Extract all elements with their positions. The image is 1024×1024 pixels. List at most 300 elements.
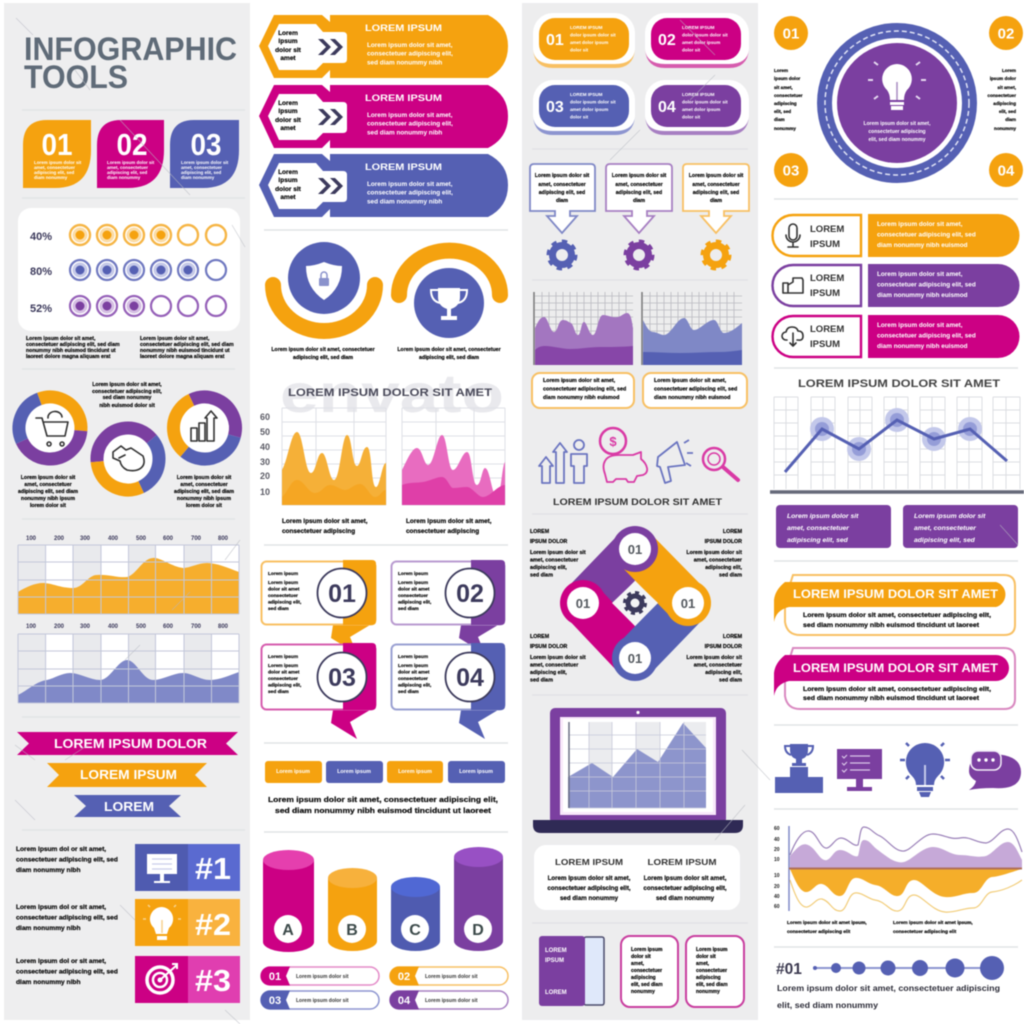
cylinder A [263,850,314,952]
callout: orange with gear: adipiscing elit, sed [693,190,739,196]
panel: laptop text: LOREM IPSUM [648,857,716,867]
text block: diamond captions: LOREM [530,634,549,640]
text block: medallion sides: Lorem [774,68,788,73]
panel: laptop text: Lorem ipsum dolor sit amet, [644,875,726,882]
text block: medallion sides: diam [1005,117,1016,122]
buttons row: Lorem ipsum [337,769,371,775]
note box right: elit, sed diam [696,982,728,988]
card: 02 [392,560,505,654]
text block: donut captions: Lorem ipsum dolor sit [21,475,75,481]
chart: orange area: 300 [80,536,91,542]
chart: blue area: 600 [163,624,174,630]
callout: purple with gear [606,164,672,268]
note box right: consectetuer [696,968,727,974]
card 02 [97,120,164,188]
y axis labels: 60 [260,412,270,422]
banner: blue: sed diam nonummy nibh [367,198,442,206]
purple note left: Lorem ipsum dolor sit [787,513,858,520]
callout: blue with gear: adipiscing elit, sed [539,190,585,196]
ribbon: magenta [17,732,238,755]
row: purple hand: LOREM [810,273,844,284]
buttons row [265,761,505,783]
caption box left [532,373,634,408]
text block: donut captions: lorem dolor sit [30,503,66,509]
chart: orange area: 700 [191,536,202,542]
text block: badge captions: adipiscing elit, sed diam [419,355,479,361]
text block: medallion sides [774,68,1016,131]
text block: peak captions: consectetuer adipiscing [282,528,355,535]
card: 02: Lorem ipsum [398,572,428,577]
text block: diamond captions: amet, consectetuer [694,558,742,564]
tag 01: dolor ipsum dolor sit [570,32,616,38]
ribbon: blue: LOREM [104,799,154,814]
row: orange mic: IPSUM [810,239,840,250]
card 01: Lorem ipsum dolor sit [34,160,81,165]
badge: shield [273,242,375,331]
text block: wave captions [787,920,973,935]
watermark: envato [280,364,504,424]
text block: donut captions: nonummy nibh ipsum [21,496,75,502]
text block: rows: diam nonummy nibh [16,925,80,932]
chart: orange area: 100 [26,536,37,542]
label card: orange: sed diam nonummy nibh euismod tincidunt ut laoreet [803,622,979,629]
panel: laptop text: LOREM IPSUM [555,857,623,867]
row: purple hand: consectetuer adipiscing elit, sed [877,282,976,288]
banner: orange: dolor sit [275,47,302,54]
tag 04: dolor ipsum dolor sit [682,100,728,104]
text block: diamond captions: IPSUM DOLOR [530,539,568,545]
number circles [774,16,1023,187]
text block: donut captions: Lorem ipsum dolor sit amet, [92,382,162,388]
card: 03 [262,643,376,739]
panel: laptop text: consectetuer adipiscing elit, [643,885,727,892]
card 01: amet, consectetuer [34,165,75,170]
banner: magenta [259,85,508,148]
heading: middle charts: LOREM IPSUM DOLOR SIT AMET [288,387,492,399]
card: 02: adipiscing elit, [398,600,432,606]
tag 01: LOREM IPSUM [570,25,602,30]
banner: blue: dolor sit [275,186,302,193]
banner: magenta: sed diam nonummy nibh [367,130,442,136]
icon: monitor checklist [837,749,882,791]
callout: purple with gear: diam [633,198,645,204]
book: LOREM [545,990,567,996]
note box right: amet, [696,961,710,967]
caption box right [643,373,747,408]
tag 04: 04 [658,99,676,116]
diagram: diamond cycle: 01 [628,651,642,666]
tag 03 [533,80,635,135]
chart: orange area: 500 [136,536,147,542]
book: IPSUM [545,958,564,964]
text block: peak captions: Lorem ipsum dolor sit amet, [282,518,368,525]
callout: orange with gear: amet, consectetuer [692,182,740,188]
chart: orange peaks [282,408,386,505]
donut: hand [84,415,172,503]
banner: blue: Lorem ipsum dolor sit amet, [367,181,453,188]
chart: mirrored waves: 20 [774,847,780,853]
label card: orange [774,575,1015,635]
banner: orange [259,15,508,78]
chart: line [770,397,1024,492]
text block: donut captions [18,382,234,509]
cylinder A: A [282,922,294,939]
badge #2 [135,899,240,946]
row 80% [30,260,226,280]
banner: magenta: ipsum [278,108,298,115]
card: 02: Lorem ipsum [398,580,428,586]
donut: growth bars [161,384,248,472]
chart: blue area: 200 [54,624,65,630]
chart: orange area: 200 [54,536,65,542]
row 40% [30,225,226,245]
tag 03: 03 [546,99,564,116]
text block: donut captions: lorem dolor sit [186,503,222,509]
text block: under dots: Lorem ipsum dolor sit amet, [140,336,209,342]
text block: donut captions: amet, consectetuer [180,482,228,488]
pill 01: 01 [269,971,281,983]
chart: purple dense [534,292,633,365]
text block: donut captions: consectetuer adipiscing elit, [92,389,162,395]
card: 03: dolor sit amet [268,670,300,676]
ribbon: orange [47,763,207,787]
text block: diamond captions: adipiscing elit, [705,670,743,676]
text block: medallion sides: sit amet, [997,85,1016,90]
tag 03: dolor sit [570,114,589,120]
banner: orange: Lorem ipsum dolor sit amet, [367,42,453,49]
heading: line chart: LOREM IPSUM DOLOR SIT AMET [798,378,1000,390]
text block: badge captions: Lorem ipsum dolor sit amet, consectetuer [397,347,501,353]
badge #3: #3 [195,963,231,998]
pill 04: 04 [398,995,411,1007]
card 01: adipiscing elit, sed [34,170,75,175]
chart: mirrored waves: 60 [774,904,780,910]
text block: diamond captions: adipiscing elit, [705,565,743,571]
caption box left: consectetuer adipiscing elit, sed [543,386,626,392]
medallion: lightbulb: consectetuer adipiscing [868,129,926,135]
panel: laptop text: consectetuer adipiscing elit, [547,885,631,892]
chart: blue area [18,624,239,703]
cylinder B: B [346,922,358,939]
callout: blue with gear: amet, consectetuer [538,182,586,188]
text block: rows: Lorem ipsum dol or sit amet, [16,904,106,911]
text block: diamond captions: sed diam [719,572,742,578]
icon: piggy bank [600,428,647,482]
row: magenta cloud: consectetuer adipiscing elit, sed [877,332,976,340]
icon: podium trophy [775,744,823,793]
badge #2: #2 [195,907,231,942]
card 01: 01 [42,127,72,162]
row: purple hand: IPSUM [810,288,840,299]
text block: diamond captions: IPSUM DOLOR [705,644,742,650]
cylinder C: C [409,922,421,939]
icon: solid bulb [900,743,950,797]
tag 04 [645,80,749,135]
note box right: nonummy [696,989,720,995]
note box left: amet, [631,961,645,967]
banner: blue [259,154,508,217]
text block: under dots: consectetuer adipiscing elit, sed diam [140,342,234,348]
card: 01: sed diam [268,606,289,612]
laptop chart [533,708,743,833]
text block: medallion sides: ipsum dolor [990,76,1016,81]
banner: orange: ipsum [278,38,298,45]
chart: blue area: 400 [108,624,119,630]
text block: medallion sides: nonummy [774,126,796,131]
y axis labels: 40 [260,442,270,452]
row: magenta cloud: Lorem ipsum dolor sit amet, [877,322,963,329]
text block: medallion sides: adipiscing [774,101,797,106]
cylinder B [328,868,377,951]
card: 04: sed diam [398,689,419,695]
y axis labels: 30 [260,457,270,467]
card: 01: adipiscing elit, [268,600,302,606]
card 02: Lorem ipsum dolor sit [107,160,154,165]
text block: rows: diam nonummy nibh [16,867,80,874]
row: purple hand: diam nonummy nibh euismod [877,292,968,299]
card: 01: dolor sit amet [268,586,300,592]
chart: mirrored waves [774,826,1022,912]
chart: orange area: 400 [108,536,119,542]
pill 02: 02 [398,971,410,983]
text block: wave captions: Lorem ipsum dolor sit amet ipsum, [787,921,867,926]
text block: medallion sides: adipiscing [993,101,1016,106]
callout: blue with gear: Lorem ipsum dolor sit [535,173,589,179]
card: 04: Lorem ipsum [398,655,428,660]
chart: orange area [18,536,239,614]
chart: mirrored waves: 40 [774,894,780,900]
card: 01: Lorem ipsum [268,580,298,586]
row: orange mic: Lorem ipsum dolor sit amet, [877,221,963,228]
text block: timeline [777,983,1000,1010]
list: ranked items [16,844,240,1003]
y axis labels: 10 [260,487,270,497]
card: 04: adipiscing elit, [398,682,432,688]
card: 03: sed diam [268,689,289,695]
purple note left: amet, consectetuer [787,525,849,532]
text block: rows [16,846,118,986]
banner: magenta: Lorem [278,100,298,107]
caption box left: diam nonummy nibh euismod [543,395,619,401]
card 01 [23,120,91,188]
callout: blue with gear: diam [556,198,568,204]
timeline: #01 [776,956,1004,980]
text block: under dots [26,336,234,360]
text block: diamond captions: amet, consectetuer [530,662,578,668]
text block: medallion sides: elit, sed [774,109,791,114]
text block: donut captions: Lorem ipsum dolor sit [177,475,231,481]
banner: orange: LOREM IPSUM [365,23,442,33]
card: 03: 03 [328,664,356,692]
text block: diamond captions: LOREM [723,634,742,640]
row: orange mic: consectetuer adipiscing elit, sed [877,232,976,238]
donut: cart [9,387,91,469]
card: 04 [392,643,505,739]
text block: medallion sides: consectetuer [774,93,803,98]
callout: purple with gear: amet, consectetuer [615,182,663,188]
pill 02 [390,966,508,986]
pill 04: Lorem ipsum dolor sit [425,998,478,1004]
card 03: diam nonummy [181,175,215,180]
cylinder D [454,847,503,951]
panel: percentage dots [18,208,240,331]
row 52%: 52% [30,303,52,315]
card: 02: 02 [456,580,484,608]
text block: peak captions: Lorem ipsum dolor sit amet, [406,518,492,525]
caption box right: diam nonummy nibh euismod [654,395,730,401]
ribbon: blue [74,795,181,817]
cylinder D: D [472,922,484,939]
tag 01: dolor sit [570,48,589,52]
icon: magnifier [703,448,738,480]
card: 02: consectetuer [398,593,428,599]
icon: megaphone [657,440,693,483]
y axis labels: 50 [260,427,270,437]
number circles: 01 [783,26,799,42]
banner: blue: Lorem [278,169,298,176]
text block: diamond captions: sed diam [719,678,742,684]
text block: diamond captions: Lorem ipsum dolor sit [530,550,586,556]
note box left: nonummy [631,989,655,995]
text block: diamond captions: Lorem ipsum dolor sit [530,655,586,661]
card 02: 02 [116,127,148,162]
banner: orange: Lorem [278,30,298,37]
text block: donut captions: adipiscing elit, sed diam [174,489,234,495]
text block: under dots: laoreet dolore magna aliquam erat [140,354,225,360]
banner: blue: LOREM IPSUM [365,162,442,172]
book [539,936,604,1006]
caption box right: Lorem ipsum dolor sit amet, [654,378,726,384]
tag 02: 02 [658,32,676,49]
row: magenta cloud [773,315,1020,358]
banner: blue: ipsum [278,177,298,184]
text block: diamond captions: amet, consectetuer [694,662,742,668]
medallion: lightbulb: elit, sed diam nonummy [869,137,926,143]
row: magenta cloud: LOREM [810,324,844,335]
text block: buttons caption: Lorem ipsum dolor sit amet, consectetuer adipiscing elit, [268,795,498,804]
medallion: lightbulb: Lorem ipsum dolor sit amet, [864,121,930,127]
text block: wave captions: consectetuer adipiscing elit [893,929,957,935]
text block: rows: consectetuer adipiscing elit, sed [16,914,118,922]
note box left: Lorem ipsum [631,947,662,953]
card 03: 03 [190,127,222,162]
chart: orange area: 800 [218,536,229,542]
chart: orange area: 600 [163,536,174,542]
tag 04: amet dolor ipsum [682,107,720,112]
text block: under dots: consectetuer adipiscing elit, sed diam [26,342,120,348]
row: orange mic: diam nonummy nibh euismod [877,242,968,249]
purple note right: amet, consectetuer [914,525,976,532]
card: 04: consectetuer [398,676,428,682]
number circles: 04 [998,162,1015,180]
icon: hand [113,446,144,471]
tag 02: dolor sit [682,48,701,52]
text block: diamond captions: Lorem ipsum dolor sit [686,655,742,661]
text block: rows: consectetuer adipiscing elit, sed [16,856,118,864]
card: 04: dolor sit amet [398,670,430,676]
banner: blue: consectetuer adipiscing elit, [367,190,453,196]
text block: medallion sides: nonummy [994,126,1016,131]
note box left: elit, sed diam [631,982,663,988]
text block: diamond captions [530,529,743,684]
text block: buttons caption [268,795,498,815]
note box right [686,936,744,1007]
note box left: dolor sit [631,954,651,960]
chart: blue area: 100 [26,624,37,630]
label card: magenta: LOREM IPSUM DOLOR SIT AMET [793,663,998,675]
note box right: adipiscing [696,975,721,981]
cylinder C [391,877,440,951]
tag 01: amet dolor ipsum [570,40,608,45]
chart: blue area: 700 [191,624,202,630]
pill 04 [390,990,508,1010]
tag 03: LOREM IPSUM [570,92,602,97]
purple note left [776,505,891,548]
banner: magenta: amet [280,125,296,132]
icon: bulb [868,62,926,110]
text block: medallion sides: consectetuer [987,93,1016,98]
panel: numbered leaf cards [23,120,239,188]
card 03: Lorem ipsum dolor sit [181,160,228,165]
text block: peak captions: consectetuer adipiscing [406,528,479,535]
y axis labels [260,412,270,497]
panel: laptop text [534,845,740,910]
card 02: amet, consectetuer [107,165,148,170]
label card: orange: Lorem ipsum dolor sit amet, consectetuer adipiscing elit, [803,612,991,619]
text block: wave captions: consectetuer adipiscing elit [787,929,851,935]
tag 03: amet dolor ipsum [570,107,608,112]
badge #1 [135,844,240,891]
diagram: diamond cycle: 01 [681,596,695,611]
diagram: diamond cycle: 01 [576,596,590,611]
row: magenta cloud: diam nonummy nibh euismod [877,343,968,350]
text block: donut captions: amet, consectetuer [24,482,72,488]
text block: diamond captions: Lorem ipsum dolor sit [686,550,742,556]
banner: blue: amet [280,194,296,201]
callout: purple with gear: Lorem ipsum dolor sit [612,173,666,179]
tag 04: LOREM IPSUM [682,92,714,97]
tag 01 [533,13,635,68]
text block: under dots: nonummy nibh euismod tincidunt ut [140,348,230,354]
chart: mirrored waves: 10 [774,857,780,863]
row 52% [30,296,226,316]
text block: donut captions: sed diam nonummy [103,395,151,401]
banner: magenta: dolor sit [275,117,302,124]
callout: purple with gear: adipiscing elit, sed [616,190,662,196]
ribbon: magenta: LOREM IPSUM DOLOR [54,736,208,751]
chart: blue dense [642,292,742,365]
tag 02 [645,13,749,68]
tag 01: 01 [546,32,564,49]
note box left [621,936,678,1007]
pill 01: Lorem ipsum dolor sit [296,974,349,980]
callout: orange with gear: diam [710,198,722,204]
card 03 [170,120,239,188]
badge #3 [135,956,240,1003]
text block: badge captions [271,347,501,361]
text block: diamond captions: IPSUM DOLOR [530,644,568,650]
text block: timeline: Lorem ipsum dolor sit amet, consectetuer adipiscing [777,983,1000,993]
buttons row: Lorem ipsum [398,769,432,775]
text block: rows: Lorem ipsum dol or sit amet, [16,846,106,853]
card: 03: Lorem ipsum [268,655,298,660]
banner: orange: consectetuer adipiscing elit, [367,50,453,58]
callout: orange with gear [683,164,749,268]
banner: orange: amet [280,55,296,62]
text block: donut captions: adipiscing elit, sed diam [18,489,78,495]
purple note left: adipiscing elit, sed [787,537,849,544]
text block: under dots: nonummy nibh euismod tincidunt ut [26,348,116,354]
